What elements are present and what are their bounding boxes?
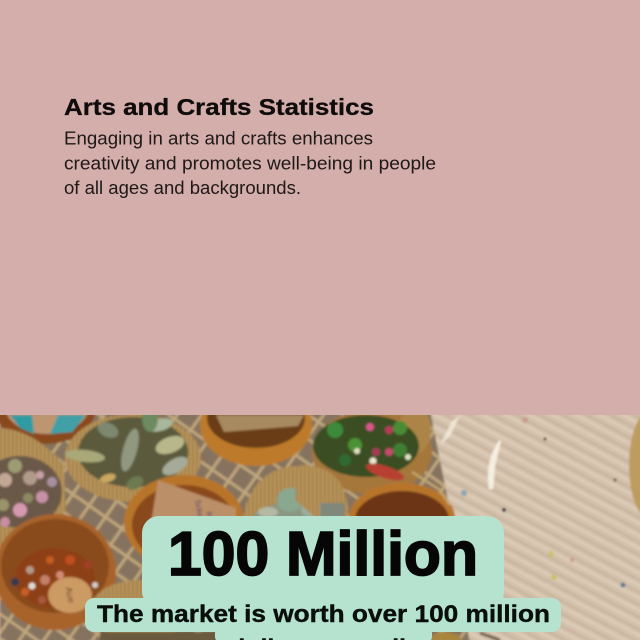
big number: 100 Million [168,520,478,589]
paper cup with green and pink flowers [312,406,432,494]
stat description [97,601,550,640]
description text [64,128,436,198]
woven loop handles [412,472,450,505]
basket at right edge [629,411,640,519]
paper cup with dried roses [0,428,66,548]
paper cup with sage leaves [243,465,348,516]
stat callout: mint label boxes [85,516,561,640]
center wood bowl with kraft label: Scke [193,499,205,518]
right wood bowl [348,482,456,516]
paper cup edge and stones [294,464,349,516]
center wood bowl with kraft label: Ro [204,511,215,523]
top wood bowl [199,415,313,467]
photo: bowls of craft materials on a wooden table [0,415,640,640]
center wood bowl with kraft label [123,474,244,557]
lower cup and seeds [90,580,500,640]
wooden table [430,415,640,640]
description text: creativity and promotes well-being in people [64,154,436,174]
stat description: The market is worth over 100 million [97,601,550,628]
bottom-left wood bowl with red stones [0,514,116,630]
table glare and paint flecks [440,416,626,588]
title: Arts and Crafts Statistics [64,94,374,120]
woven mat [0,410,470,640]
description text: of all ages and backgrounds. [64,178,301,198]
paper cup with dried leaves [64,404,201,502]
bottom-left wood bowl with red stones: Aue [64,586,76,604]
description text: Engaging in arts and crafts enhances [64,128,373,148]
teal stones bowl [0,415,96,445]
